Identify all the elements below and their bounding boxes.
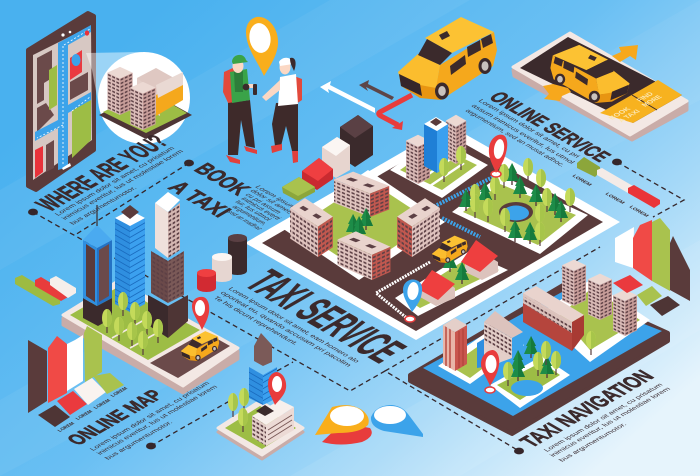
heading: where are you: WHERE ARE YOU? <box>29 131 175 215</box>
bubble: red <box>322 423 372 444</box>
bar legend: online service: LOREM <box>603 192 626 205</box>
block: back towers <box>390 115 488 198</box>
text: taxi service: Te his dicunt reprehendunt. <box>211 295 300 347</box>
long red block <box>523 286 584 351</box>
bubble: yellow <box>315 405 369 435</box>
bubble: blue <box>371 405 423 437</box>
small isometric building <box>218 333 303 459</box>
phone: online service <box>513 33 687 140</box>
striped tower <box>443 318 467 371</box>
arrow: white <box>320 81 375 113</box>
bar legend: online service: LOREM <box>627 205 650 218</box>
text: online map: bus argumentumotor. <box>104 420 175 461</box>
screen blocks <box>538 280 650 362</box>
pin: red <box>192 297 209 330</box>
tiles: right <box>613 275 680 316</box>
text: where are you: inimicus everitur, lus ut molestiae lorem <box>61 149 186 221</box>
button: find more: FIND <box>636 91 655 103</box>
text: book a taxi: inimicus everti <box>239 196 282 221</box>
pin: blue on road <box>403 279 422 322</box>
heading: online service: ONLINE SERVICE <box>484 89 615 165</box>
text: online map <box>89 381 220 461</box>
tower: brown <box>148 192 188 338</box>
block: park <box>452 158 588 254</box>
text: taxi service <box>211 286 361 368</box>
bar legend: online service <box>570 157 660 218</box>
road path: blue <box>433 177 493 237</box>
text: where are you: bus argumentumotor. <box>69 185 139 226</box>
text: book a taxi: argumentium, <box>230 204 269 227</box>
woman <box>262 58 302 163</box>
road taxi <box>432 236 468 263</box>
cubes chart <box>282 115 373 201</box>
arrow: dark <box>359 80 394 100</box>
text: online service: Lorem ipsum dolor sit amet, cu pri <box>476 98 582 159</box>
bar chart: online map <box>28 326 102 413</box>
pin centre <box>272 376 282 392</box>
text: online service: assum inimicus everitur, lus utmol <box>469 103 576 165</box>
phone taxi <box>550 45 630 103</box>
text: taxi navigation: bus argumentumotor. <box>558 422 629 463</box>
pin <box>268 372 286 405</box>
road path: white route <box>376 262 430 319</box>
text: where are you: Lorem ipsum dolor sit amet, cu prisatum <box>54 146 177 217</box>
dashed connector lines <box>33 162 684 451</box>
man <box>223 55 257 164</box>
trees <box>102 292 163 355</box>
bar chart: right <box>615 218 690 301</box>
pin: red <box>481 350 499 393</box>
big taxi <box>398 17 497 100</box>
text: book a taxi: dolor sit amet, <box>248 188 294 215</box>
labels: lorem: LOREM <box>75 409 94 421</box>
heading: book a taxi: A TAXI <box>163 177 237 221</box>
tower: dark blue <box>83 205 112 326</box>
heading: online map: ONLINE MAP <box>62 387 169 449</box>
arrow: yellow left <box>543 84 571 101</box>
button: find more: MORE <box>641 94 664 108</box>
small taxi <box>181 331 219 361</box>
tiles: online map <box>38 373 124 427</box>
text: book a taxi: tur, lus utmol <box>233 199 273 222</box>
labels: lorem: LOREM <box>110 386 129 398</box>
pin: yellow location <box>246 17 278 76</box>
text: online map: Lorem ipsum dolor sit amet, cu prisatum <box>89 381 212 452</box>
text: taxi service: oporteat eu, quando accusam pri pacolim <box>218 290 353 368</box>
bar legend: online service: LOREM <box>570 174 593 187</box>
block: apartments <box>282 170 445 280</box>
office block <box>477 311 523 368</box>
button: book a taxi: A TAXI <box>617 109 642 124</box>
labels: lorem: LOREM <box>93 398 112 410</box>
text: taxi service: Lorem ipsum dolor sit amet, eam homero alo <box>226 286 361 364</box>
labels: lorem: LOREM <box>57 421 76 433</box>
phone: online map <box>63 192 238 393</box>
flat bars: online map <box>15 275 76 306</box>
people: tourists <box>223 55 302 164</box>
tower: blue <box>115 205 145 312</box>
labels: lorem <box>57 386 129 433</box>
text: book a taxi: sed an madhac <box>225 209 264 232</box>
heading: book a taxi <box>163 159 256 221</box>
zoom circle with buildings <box>98 52 192 144</box>
text: book a taxi <box>225 184 298 232</box>
tablet: taxi navigation <box>410 260 668 434</box>
text: taxi navigation: inimicus everitur, lus ut molestiae lorem <box>549 386 673 458</box>
text: online service: argumentium, sed an musat adhoc. <box>463 108 566 168</box>
phone map: where are you <box>28 13 94 190</box>
arrow: yellow up <box>612 45 638 62</box>
arrow: red <box>379 95 412 130</box>
heading: book a taxi: BOOK <box>189 159 256 199</box>
heading: taxi service: TAXI SERVICE <box>233 264 416 370</box>
text: where are you <box>54 146 186 226</box>
speech bubbles <box>315 405 423 444</box>
text: book a taxi: Lorem ipsum <box>253 184 298 210</box>
zoom light cone <box>86 52 142 112</box>
pin: red on road <box>489 135 507 177</box>
cylinders chart <box>197 234 247 292</box>
text: book a taxi: cu pri assum <box>243 192 283 215</box>
text: online service <box>463 98 582 168</box>
button: book a taxi: BOOK <box>608 106 633 121</box>
text: online map: inimicus everitur, lus ut molestiae lorem <box>96 384 220 456</box>
text: taxi navigation: Lorem ipsum dolor sit amet, cu prisatum <box>543 382 665 453</box>
text: taxi navigation <box>543 382 673 463</box>
city board <box>245 115 620 340</box>
connector dots <box>28 159 622 454</box>
block: houses <box>395 240 508 316</box>
